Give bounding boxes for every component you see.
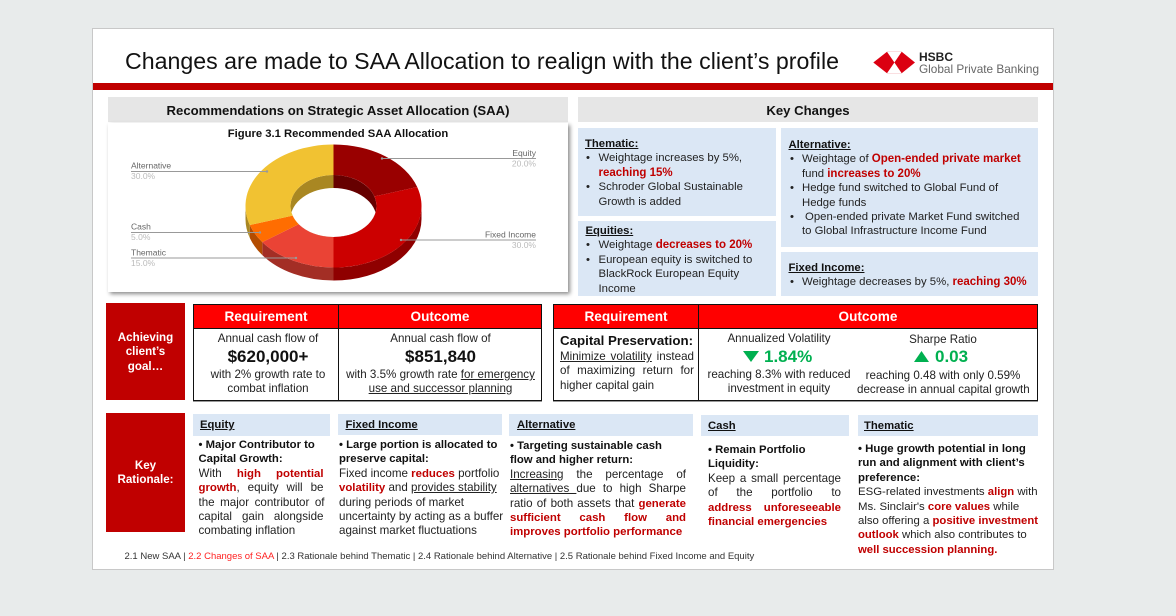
panel: thematic changes: Schroder Global Sustainable (598, 181, 743, 193)
column: thematic rationale: Thematic (864, 420, 914, 432)
column: thematic rationale: ESG-related investments align with (858, 486, 1038, 498)
panel: fixed income changes: Fixed Income: (788, 262, 864, 274)
donut hole walls (290, 175, 376, 237)
panel: equities changes: • (586, 254, 590, 266)
column: equity rationale: • Major Contributor to (198, 439, 315, 451)
cell: capital preservation: higher capital gain (560, 379, 654, 392)
cell: capital preservation (560, 333, 694, 392)
column: fixed income rationale: during periods of market (339, 496, 464, 509)
panel: thematic changes: Weightage increases by 5%, (598, 152, 742, 164)
column: thematic rationale (858, 415, 1038, 556)
table: capital preservation requirement and outcome (553, 304, 1038, 401)
logo: HSBC Global Private Banking (873, 50, 1039, 76)
red divider bar (93, 83, 1053, 90)
panel: donut chart (108, 123, 568, 292)
heading: recommendations on SAA (108, 97, 568, 122)
slice: thematic (262, 224, 334, 268)
column: thematic rationale: • Huge growth potential in long (858, 443, 1026, 455)
panel: thematic changes: reaching 15% (598, 167, 673, 179)
column: equity rationale: the major contributor of (198, 496, 324, 509)
cell: cash flow requirement (210, 332, 325, 395)
panel: alternative changes: Weightage of Open-ended private market (802, 153, 1021, 165)
cell: sharpe ratio (857, 333, 1030, 396)
icon: down triangle (743, 351, 759, 362)
cell: capital preservation: of maximizing return for (560, 364, 694, 377)
label: achieving client's goal: goal… (128, 360, 163, 373)
column: fixed income rationale: Fixed Income (346, 419, 418, 431)
column: alternative rationale: Increasing the percentage of (510, 468, 686, 481)
column: cash rationale: financial emergencies (708, 516, 827, 528)
panel: equities changes: Equities: (586, 225, 633, 237)
column: thematic rationale: well succession planning. (858, 544, 997, 556)
logo wordmark: HSBC (919, 50, 953, 64)
column: thematic rationale: outlook which also contributes to (858, 529, 1027, 541)
label: fixed income (400, 230, 536, 250)
column: cash rationale: Keep a small percentage (708, 472, 841, 485)
column: cash rationale: Cash (708, 420, 736, 432)
column: fixed income rationale: volatility and provides stability (339, 481, 497, 494)
donut outer walls (246, 206, 422, 280)
panel: alternative changes: • (790, 182, 794, 194)
column: cash rationale: Liquidity: (708, 458, 759, 470)
label: equity (381, 148, 537, 168)
column: alternative rationale: improves portfolio performance (510, 526, 682, 538)
cell: capital preservation: Capital Preservation: (560, 333, 693, 348)
column: fixed income rationale: uncertainty by acting as a buffer (339, 510, 503, 523)
column: thematic rationale: also offering a positive investment (858, 515, 1038, 527)
column: equity rationale: With high potential (198, 467, 324, 480)
cell: cash flow outcome: Annual cash flow of (390, 332, 491, 345)
panel: thematic changes (578, 128, 776, 216)
cell: annualized volatility: reaching 8.3% with reduced (707, 368, 851, 381)
panel: alternative changes: fund increases to 20% (802, 168, 921, 180)
label: cash: Cash (131, 222, 151, 232)
header: outcome (339, 305, 541, 328)
column: fixed income rationale (338, 414, 503, 537)
cell: sharpe ratio: decrease in annual capital growth (857, 383, 1030, 396)
panel: thematic changes: Growth is added (598, 196, 681, 208)
label: cash: 5.0% (131, 232, 151, 242)
cell: cash flow requirement: $620,000+ (228, 347, 308, 366)
panel: alternative changes: • (790, 211, 794, 223)
panel: alternative changes: Hedge fund switched to Global Fund of (802, 182, 998, 194)
panel: equities changes: • (586, 239, 590, 251)
label: alternative: Alternative (131, 160, 171, 170)
column: alternative rationale: alternatives due to high Sharpe (510, 482, 686, 495)
header: outcome (699, 305, 1037, 328)
cell: cash flow outcome: use and successor planning (369, 382, 512, 395)
column: equity rationale: Equity (200, 419, 235, 431)
icon: HSBC hexagon (873, 52, 915, 74)
logo wordmark (919, 50, 1039, 76)
panel: alternative changes: Alternative: (788, 139, 851, 151)
cell: annualized volatility: Annualized Volatility (727, 332, 831, 345)
panel: thematic changes: • (586, 181, 590, 193)
column: equity rationale: capital gain alongside (198, 510, 324, 523)
label: equity: Equity (512, 148, 537, 158)
header: outcome: Outcome (411, 309, 469, 324)
slice: equity (334, 144, 417, 196)
label: equity: 20.0% (512, 158, 536, 168)
heading: key changes (578, 97, 1038, 122)
column: equity rationale (193, 414, 330, 537)
panel: fixed income changes: • (790, 276, 794, 288)
label: alternative (131, 160, 268, 181)
footer navigation: 2.1 New SAA | 2.2 Changes of SAA | 2.3 Rationale behind Thematic | 2.4 Rationale behind Alternative | 2.5 Rationale behind Fixed Income and Equity (124, 551, 754, 562)
title: Changes are made to SAA Allocation to realign with the client’s profile (125, 48, 839, 74)
cell: sharpe ratio: Sharpe Ratio (909, 333, 977, 346)
panel: alternative changes: • (790, 153, 794, 165)
cell: cash flow outcome: $851,840 (405, 347, 476, 366)
column: thematic rationale: Ms. Sinclair's core values while (858, 501, 1019, 513)
cell: sharpe ratio: 0.03 (935, 347, 968, 366)
cell: annualized volatility: 1.84% (764, 347, 812, 366)
cell: capital preservation: Minimize volatility instead (560, 350, 694, 363)
column: alternative rationale: flow and higher return: (510, 454, 633, 466)
column: cash rationale: of the portfolio to (708, 486, 841, 499)
panel: equities changes: European equity is switched to (598, 254, 752, 266)
header: requirement: Requirement (584, 309, 668, 324)
label: key rationale (106, 413, 185, 532)
panel: equities changes: Weightage decreases to 20% (598, 239, 752, 251)
label: key rationale: Rationale: (117, 473, 174, 486)
panel: thematic changes: Thematic: (585, 138, 638, 150)
label: cash (131, 222, 261, 242)
column: fixed income rationale: • Large portion is allocated to (339, 439, 497, 451)
column: equity rationale: combating inflation (198, 524, 295, 537)
panel: alternative changes: to Global Infrastructure Income Fund (802, 225, 987, 237)
column: cash rationale: address unforeseeable (708, 502, 841, 514)
column: cash rationale: • Remain Portfolio (708, 444, 805, 456)
cell: cash flow outcome (346, 332, 535, 395)
label: achieving client's goal: client’s (126, 345, 165, 358)
header: requirement: Requirement (224, 309, 308, 324)
cell: cash flow requirement: combat inflation (227, 382, 309, 395)
column: alternative rationale: Alternative (517, 419, 575, 431)
panel: equities changes: Income (598, 283, 636, 295)
logo wordmark: Global Private Banking (919, 62, 1039, 76)
column: thematic rationale: preference: (858, 472, 920, 484)
label: alternative: 30.0% (131, 171, 156, 181)
panel: equities changes: BlackRock European Equity (598, 268, 739, 280)
panel: thematic changes: • (586, 152, 590, 164)
panel: fixed income changes: Weightage decreases by 5%, reaching 30% (802, 276, 1027, 288)
table: cash flow requirement and outcome (193, 304, 542, 401)
column: equity rationale: Capital Growth: (198, 453, 283, 465)
header: requirement (194, 305, 338, 328)
label: fixed income: 30.0% (512, 240, 536, 250)
cell: sharpe ratio: reaching 0.48 with only 0.59% (866, 369, 1020, 382)
panel: alternative changes (781, 128, 1038, 247)
panel: equities changes (578, 221, 776, 296)
header: requirement (554, 305, 698, 328)
label: fixed income: Fixed Income (485, 230, 536, 240)
chart title: Figure 3.1 Recommended SAA Allocation (228, 128, 448, 140)
column: fixed income rationale: preserve capital: (339, 453, 429, 465)
panel: fixed income changes (781, 252, 1038, 296)
column: alternative rationale (509, 414, 693, 538)
slice: alternative (245, 144, 334, 225)
cell: cash flow requirement: with 2% growth rate to (211, 368, 325, 381)
cell: annualized volatility (707, 332, 851, 395)
panel: alternative changes: Hedge funds (802, 197, 866, 209)
slice: cash (250, 216, 299, 242)
label: achieving client's goal: Achieving (118, 331, 173, 344)
icon: up triangle (914, 351, 929, 362)
column: alternative rationale: sufficient cash flow and (510, 512, 686, 524)
label: achieving client's goal (106, 303, 185, 400)
cell: cash flow outcome: with 3.5% growth rate for emergency (346, 368, 535, 381)
label: thematic (131, 248, 297, 268)
slice: fixed income (334, 187, 422, 268)
header: outcome: Outcome (839, 309, 897, 324)
column: alternative rationale: • Targeting sustainable cash (510, 440, 662, 452)
column: alternative rationale: ratio of both assets that generate (510, 497, 686, 510)
column: equity rationale: growth, equity will be (198, 481, 324, 494)
column: fixed income rationale: Fixed income reduces portfolio (339, 467, 499, 480)
heading: key changes: Key Changes (766, 103, 850, 118)
cell: annualized volatility: investment in equity (728, 382, 830, 395)
column: fixed income rationale: against market fluctuations (339, 524, 477, 537)
label: thematic: Thematic (131, 248, 167, 258)
panel: alternative changes: Open-ended private Market Fund switched (805, 211, 1019, 223)
label: key rationale: Key (135, 459, 156, 472)
column: thematic rationale: run and alignment with client’s (858, 457, 1025, 469)
column: cash rationale (701, 415, 849, 528)
cell: cash flow requirement: Annual cash flow of (218, 332, 318, 345)
label: thematic: 15.0% (131, 258, 156, 268)
heading: recommendations on SAA: Recommendations on Strategic Asset Allocation (SAA) (167, 103, 509, 118)
slide panel (92, 28, 1054, 570)
